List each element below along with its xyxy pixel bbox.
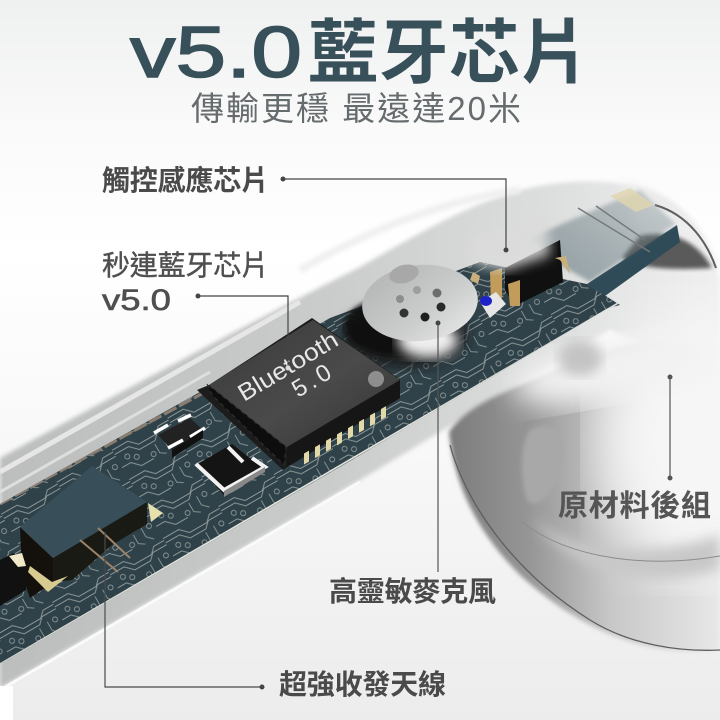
chip label: Bluetooth xyxy=(233,326,343,407)
antenna block xyxy=(0,466,163,606)
earbud bulb xyxy=(449,310,720,652)
label: material xyxy=(558,374,711,523)
label: bluetooth chip xyxy=(102,250,290,370)
label: microphone: 高靈敏麥克風 xyxy=(329,576,496,607)
label: antenna: 超強收發天線 xyxy=(279,669,446,700)
label: touch chip xyxy=(102,164,508,252)
label: touch chip: 觸控感應芯片 xyxy=(102,164,269,196)
components right of microphone xyxy=(470,215,570,318)
mic shadow xyxy=(343,303,467,367)
subtitle: 傳輸更穩 最遠達20米 xyxy=(191,90,521,127)
upper board section xyxy=(587,225,680,296)
label: antenna xyxy=(105,532,446,700)
title xyxy=(130,13,590,93)
title: 藍牙芯片 xyxy=(308,14,590,92)
microphone disc xyxy=(344,259,482,358)
small components xyxy=(154,415,265,497)
title: v5.0 xyxy=(130,13,302,93)
label: bluetooth chip: v5.0 xyxy=(102,284,171,317)
bluetooth chip xyxy=(197,318,400,470)
label: bluetooth chip: 秒連藍牙芯片 xyxy=(102,250,269,281)
chip label: 5.0 xyxy=(287,359,336,403)
label: material: 原材料後組 xyxy=(558,490,711,523)
earbud right shell crescent xyxy=(622,205,716,269)
circuit board xyxy=(0,188,720,680)
transparent earbud shell xyxy=(0,181,720,720)
label: microphone xyxy=(329,320,496,607)
